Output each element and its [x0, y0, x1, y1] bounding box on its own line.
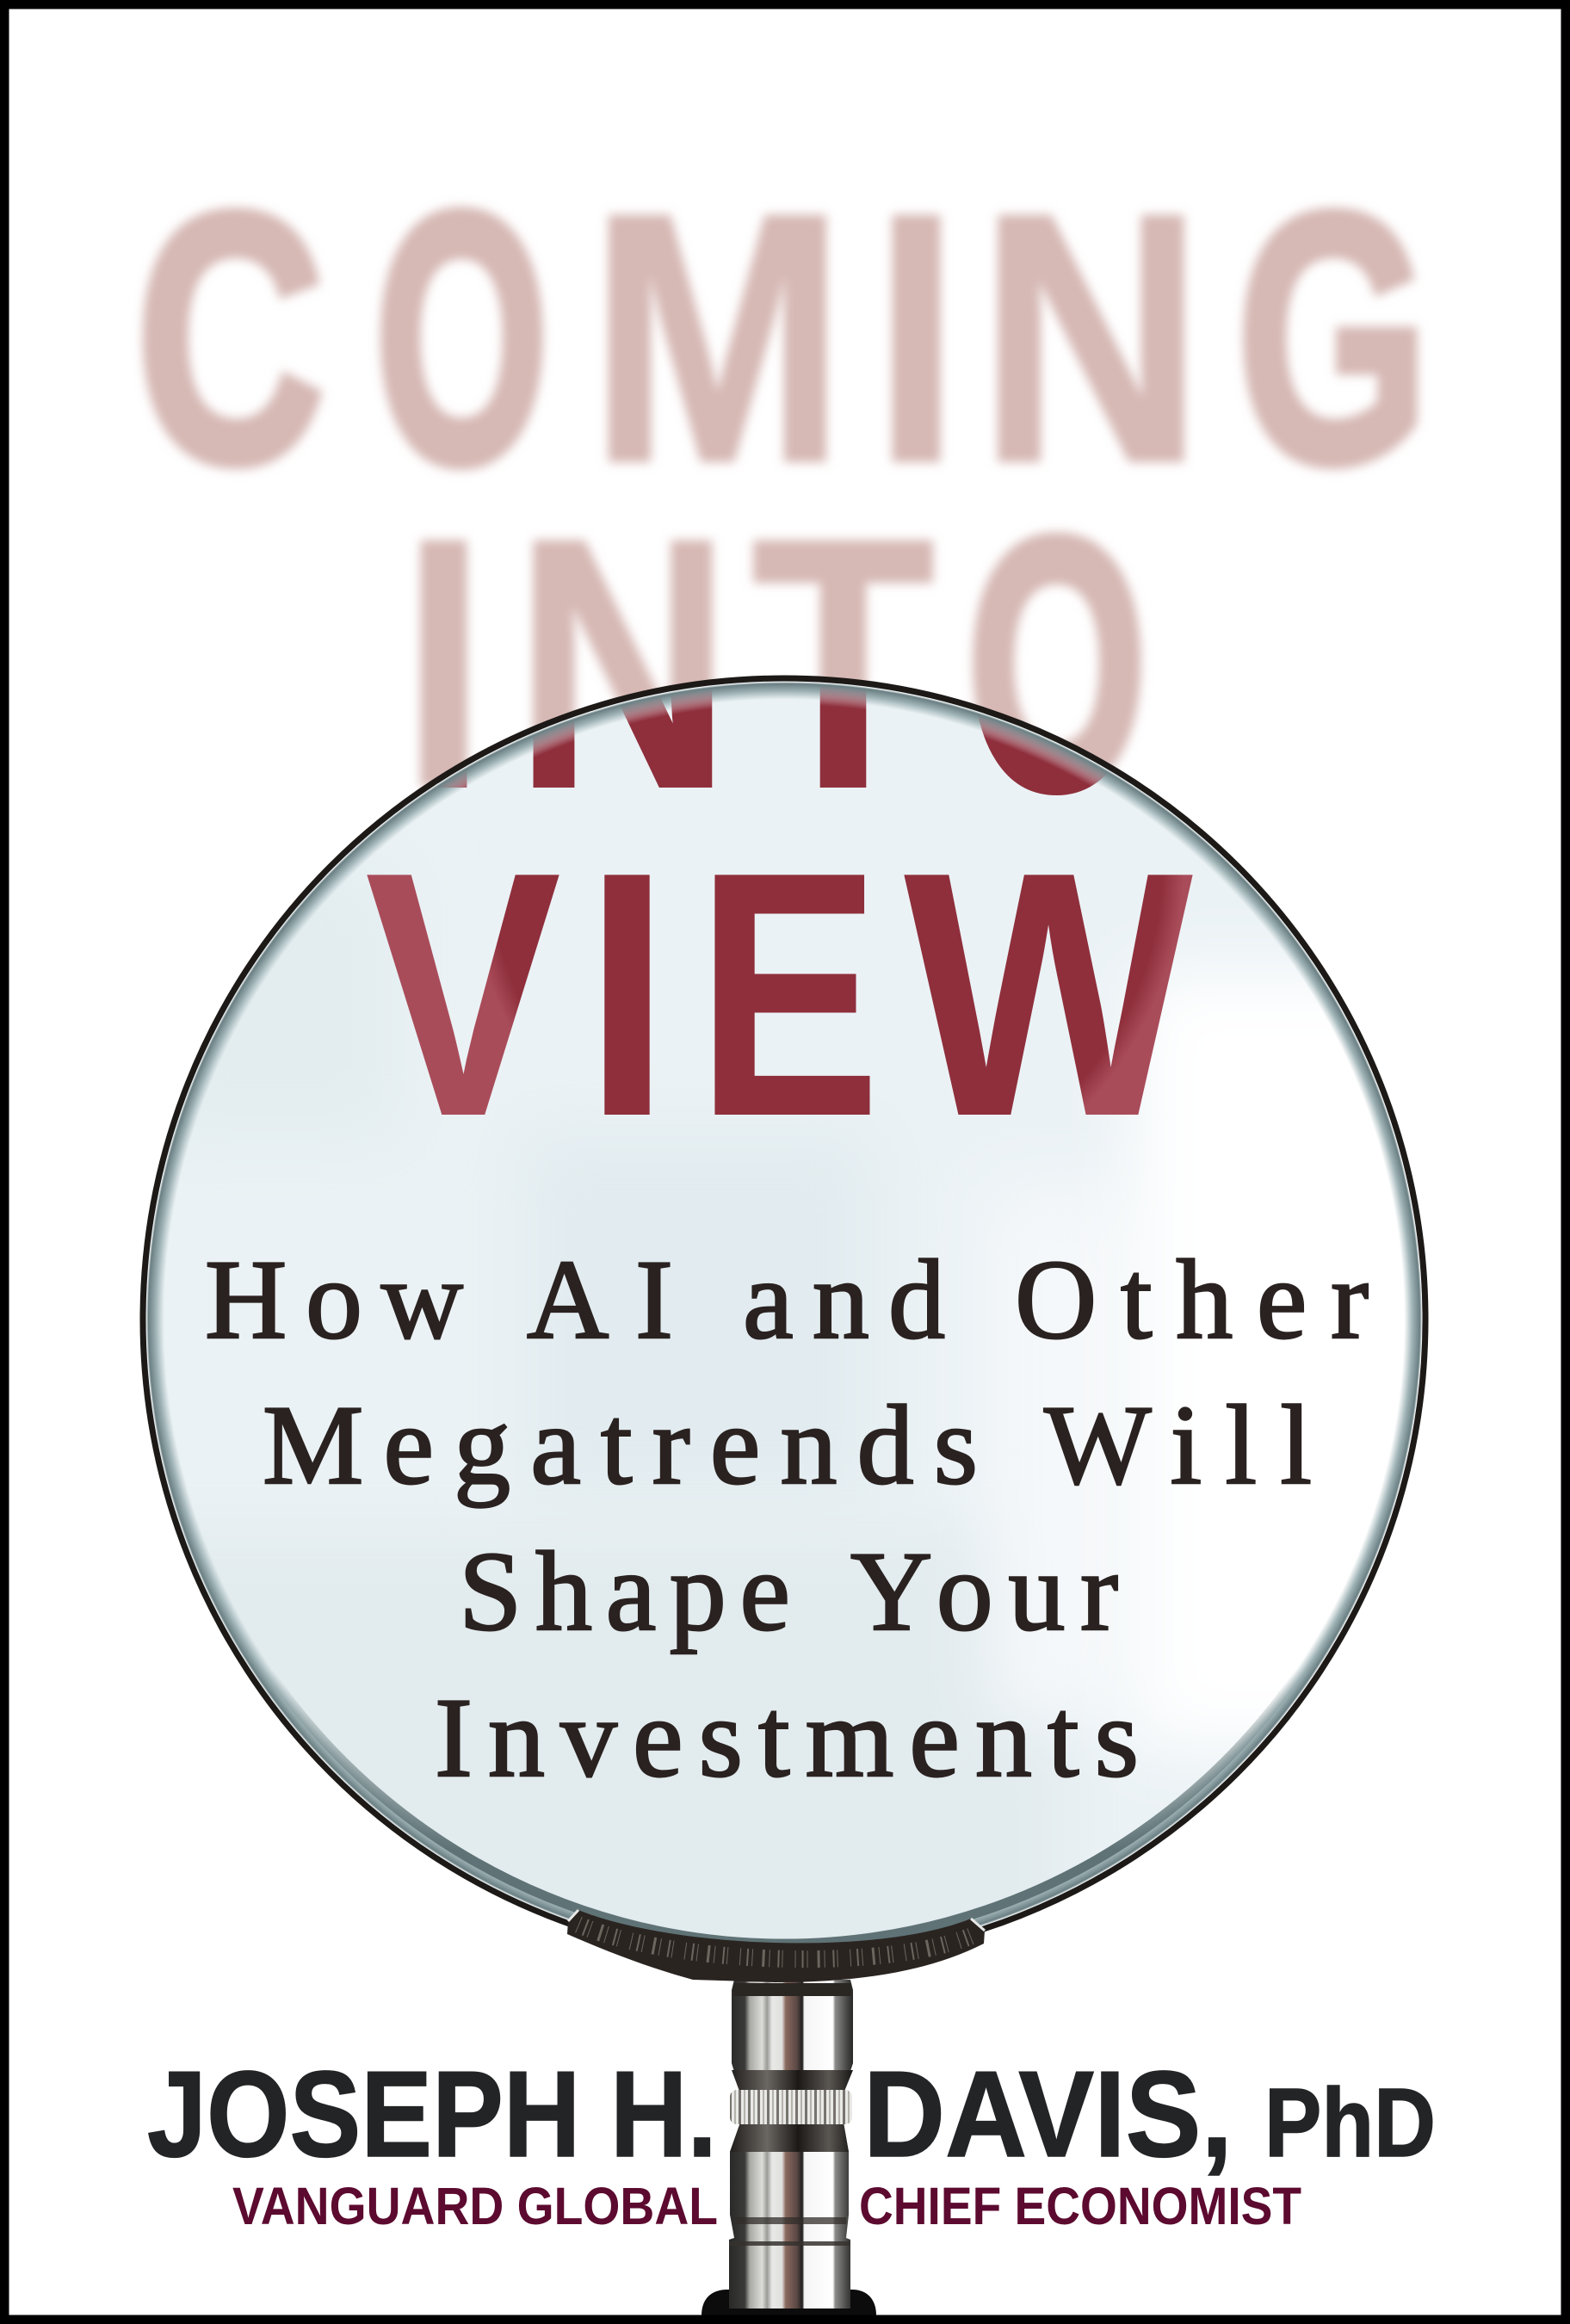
subtitle: and: [743, 1236, 945, 1363]
subtitle: [205, 1236, 1369, 1801]
author name: DAVIS,: [863, 2046, 1233, 2183]
lens rim: [143, 678, 1425, 1961]
blurred title: Coming Into: M: [590, 140, 845, 536]
sharp title: View: V: [365, 799, 563, 1189]
sharp title: View: W: [904, 799, 1196, 1189]
sharp title: View: [365, 799, 1196, 1189]
blurred title: Coming Into: I: [402, 466, 485, 862]
blurred title: Coming Into: N: [979, 140, 1203, 536]
lens bevel: [146, 682, 1422, 1957]
sharp title in lens: Into: O: [967, 466, 1147, 862]
lower teal band: [268, 1670, 1301, 1944]
handle shaft lower: [729, 2123, 850, 2309]
subtitle: Will: [1044, 1381, 1312, 1508]
handle shaft upper: [732, 1980, 853, 2092]
sharp title: View: E: [696, 799, 881, 1189]
magnifying glass handle: [702, 1980, 876, 2315]
sharp title in lens: Into: [402, 466, 1147, 862]
lens bracket: [567, 1910, 985, 1982]
blurred title: Coming Into: C: [136, 140, 325, 536]
blurred title: Coming Into: T: [751, 466, 935, 862]
lens glass: [146, 682, 1422, 1944]
sharp title in lens: Into: T: [751, 466, 935, 862]
knurled ring: [730, 2090, 852, 2124]
magnifying glass lens: [139, 675, 1429, 1944]
author title: [232, 2177, 1301, 2235]
subtitle: Shape: [459, 1528, 790, 1654]
subtitle: AI: [527, 1236, 673, 1363]
author name: JOSEPH H.: [147, 2046, 717, 2183]
author title: VANGUARD GLOBAL: [232, 2177, 718, 2235]
blurred title: Coming Into: G: [1237, 140, 1429, 536]
author name: [147, 2046, 1436, 2183]
blurred title: Coming Into: N: [515, 466, 731, 862]
subtitle: Your: [850, 1528, 1118, 1654]
author name: PhD: [1264, 2068, 1436, 2177]
blurred title: Coming Into: O: [967, 466, 1147, 862]
blurred title: Coming Into: O: [375, 140, 548, 536]
subtitle: How: [205, 1236, 463, 1363]
subtitle: Megatrends: [263, 1381, 978, 1508]
blurred title: Coming Into: I: [873, 140, 960, 536]
sharp title: View: I: [584, 799, 671, 1189]
handle base: [702, 2290, 876, 2315]
subtitle: Investments: [435, 1674, 1139, 1801]
sharp title in lens: Into: N: [515, 466, 731, 862]
author title: CHIEF ECONOMIST: [859, 2177, 1301, 2235]
subtitle: Other: [1015, 1236, 1369, 1363]
blurred title: Coming Into: [137, 201, 1424, 789]
sharp title in lens: Into: I: [402, 466, 485, 862]
